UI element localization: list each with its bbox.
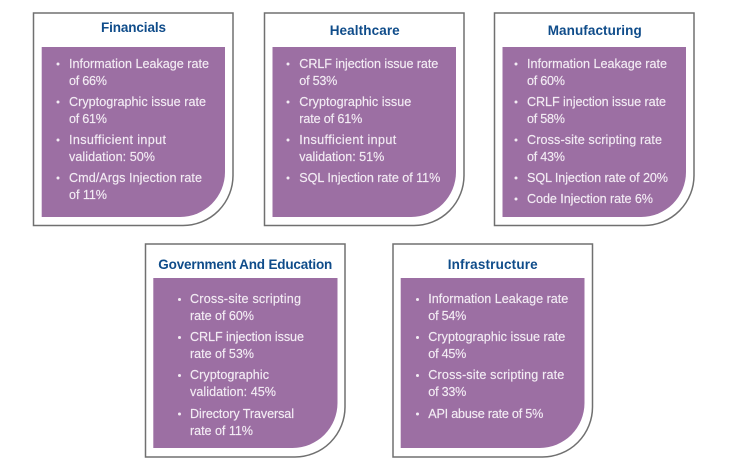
heading: Financials: Financials <box>101 20 166 35</box>
list: Infrastructure rates: Cross-site scripting rate <box>428 368 564 382</box>
list: Healthcare rates: Insufficient input <box>299 133 397 147</box>
list: Infrastructure rates: Information Leakage rate <box>428 292 568 306</box>
heading: Manufacturing: Manufacturing <box>548 23 642 38</box>
list: Manufacturing rates: SQL Injection rate of 20% <box>527 171 668 185</box>
list: Government And Education rates: Cryptographic <box>190 368 269 382</box>
list: Healthcare rates: validation: 51% <box>299 150 384 164</box>
list: Manufacturing rates: of 60% <box>527 74 565 88</box>
list: Financials rates: validation: 50% <box>69 150 155 164</box>
list: Infrastructure rates: of 45% <box>428 347 466 361</box>
panel: Manufacturing <box>494 13 694 226</box>
list: Government And Education rates: rate of 53% <box>190 347 254 361</box>
list: Financials rates <box>56 57 209 202</box>
panel: Government And Education <box>146 244 345 457</box>
list: Manufacturing rates: Cross-site scripting rate <box>527 133 662 147</box>
list: Government And Education rates: rate of 11% <box>190 424 253 438</box>
list: Manufacturing rates: of 43% <box>527 150 565 164</box>
list: Manufacturing rates: of 58% <box>527 112 565 126</box>
heading: Government And Education: Government And Education <box>158 257 332 272</box>
heading: Healthcare: Healthcare <box>330 23 400 38</box>
list: Financials rates: of 66% <box>69 74 107 88</box>
list: Infrastructure rates: Cryptographic issue rate <box>428 330 565 344</box>
panel: Financials <box>34 13 233 226</box>
panel: Infrastructure <box>393 244 592 457</box>
list: Infrastructure rates <box>416 292 568 421</box>
list: Financials rates: Cmd/Args Injection rate <box>69 171 202 185</box>
list: Financials rates: Cryptographic issue rate <box>69 95 206 109</box>
list: Government And Education rates: rate of 60% <box>190 309 254 323</box>
list: Government And Education rates: CRLF injection issue <box>190 330 304 344</box>
panel: Healthcare <box>264 13 464 226</box>
list: Government And Education rates: Directory Traversal <box>190 407 294 421</box>
list: Manufacturing rates: Information Leakage rate <box>527 57 667 71</box>
list: Government And Education rates: validation: 45% <box>190 385 276 399</box>
list: Healthcare rates: of 53% <box>299 74 337 88</box>
list: Manufacturing rates: CRLF injection issue rate <box>527 95 666 109</box>
list: Healthcare rates: Cryptographic issue <box>299 95 411 109</box>
list: Government And Education rates: Cross-site scripting <box>190 292 301 306</box>
list: Infrastructure rates: of 33% <box>428 385 466 399</box>
list: Infrastructure rates: API abuse rate of 5% <box>428 407 543 421</box>
list: Financials rates: Information Leakage rate <box>69 57 209 71</box>
list: Manufacturing rates: Code Injection rate 6% <box>527 192 653 206</box>
list: Healthcare rates: rate of 61% <box>299 112 362 126</box>
list: Financials rates: of 61% <box>69 112 107 126</box>
list: Government And Education rates <box>178 292 304 438</box>
list: Healthcare rates: SQL Injection rate of 11% <box>299 171 440 185</box>
list: Manufacturing rates <box>514 57 668 206</box>
list: Infrastructure rates: of 54% <box>428 309 466 323</box>
list: Financials rates: of 11% <box>69 188 107 202</box>
list: Healthcare rates: CRLF injection issue rate <box>299 57 438 71</box>
list: Healthcare rates <box>286 57 440 185</box>
heading: Infrastructure: Infrastructure <box>448 257 538 272</box>
list: Financials rates: Insufficient input <box>69 133 166 147</box>
